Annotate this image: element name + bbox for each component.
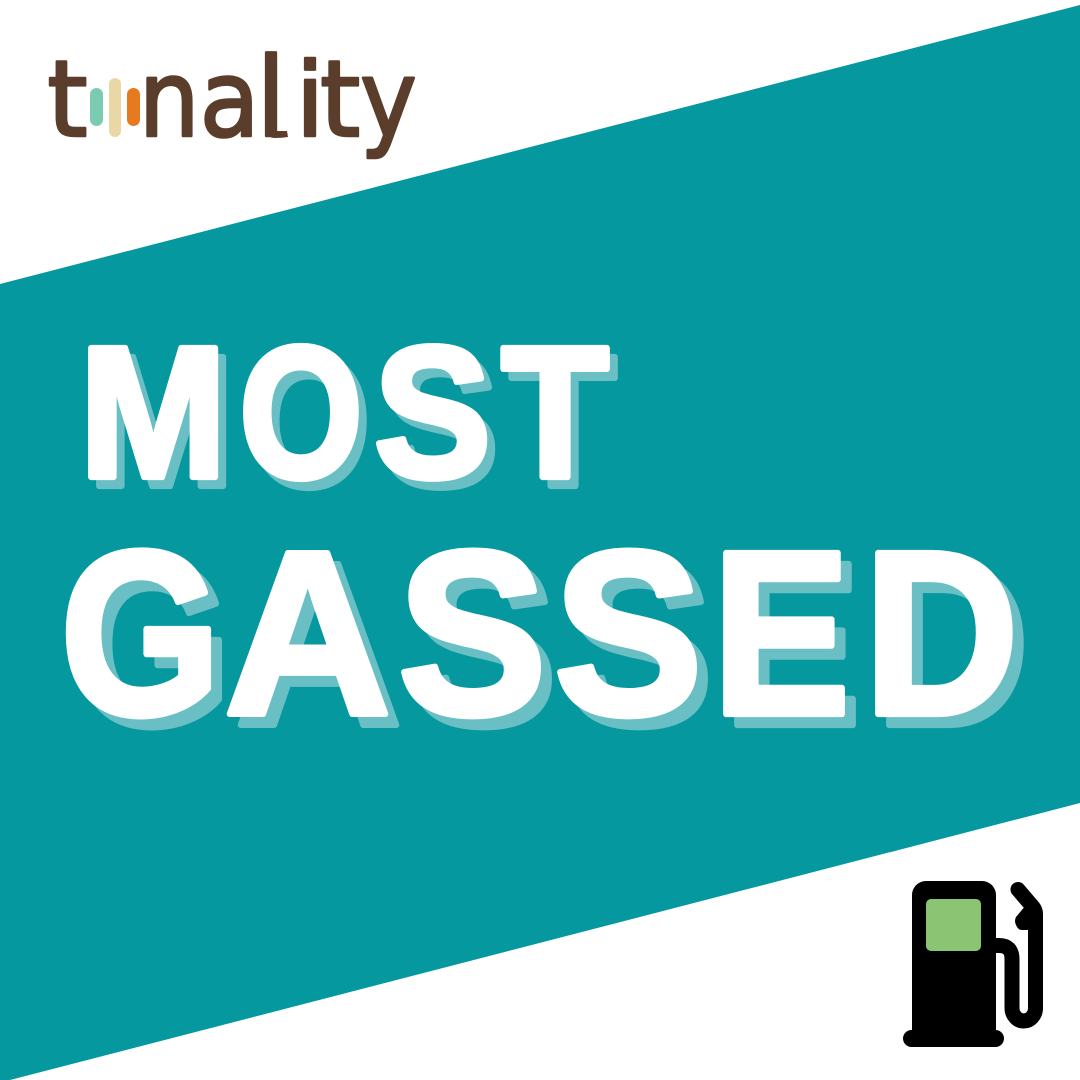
title line: MOST [79,307,609,517]
logo letter t second: t [320,38,360,161]
title line: GASSED: G [60,502,221,764]
title line: GASSED: D [864,503,1019,764]
title line: MOST: T [501,307,609,517]
logo letter y: y [360,37,417,161]
pump hose [994,890,1036,1021]
title line: GASSED: E [712,502,850,764]
pump base [903,1030,1004,1047]
pump body [912,881,996,1035]
title line: GASSED: A [224,503,391,764]
title line: GASSED: S [554,502,703,764]
logo letter a: a [200,38,260,162]
pump screen [926,899,981,951]
title line: MOST: O [239,307,363,517]
title line: GASSED: S [398,502,547,764]
pump nozzle [1015,904,1032,930]
title line: GASSED [60,502,1019,764]
logo letter l tail [266,128,288,138]
logo bars [90,78,140,137]
logo letter l: l [256,34,286,162]
logo letter n: n [139,37,200,161]
logo: tonality [47,34,417,162]
icon: fuel pump [903,881,1036,1047]
logo letter i: i [295,40,325,160]
title line: MOST: S [374,307,491,517]
logo letter t: t [47,38,88,161]
title line: MOST: M [79,308,227,517]
